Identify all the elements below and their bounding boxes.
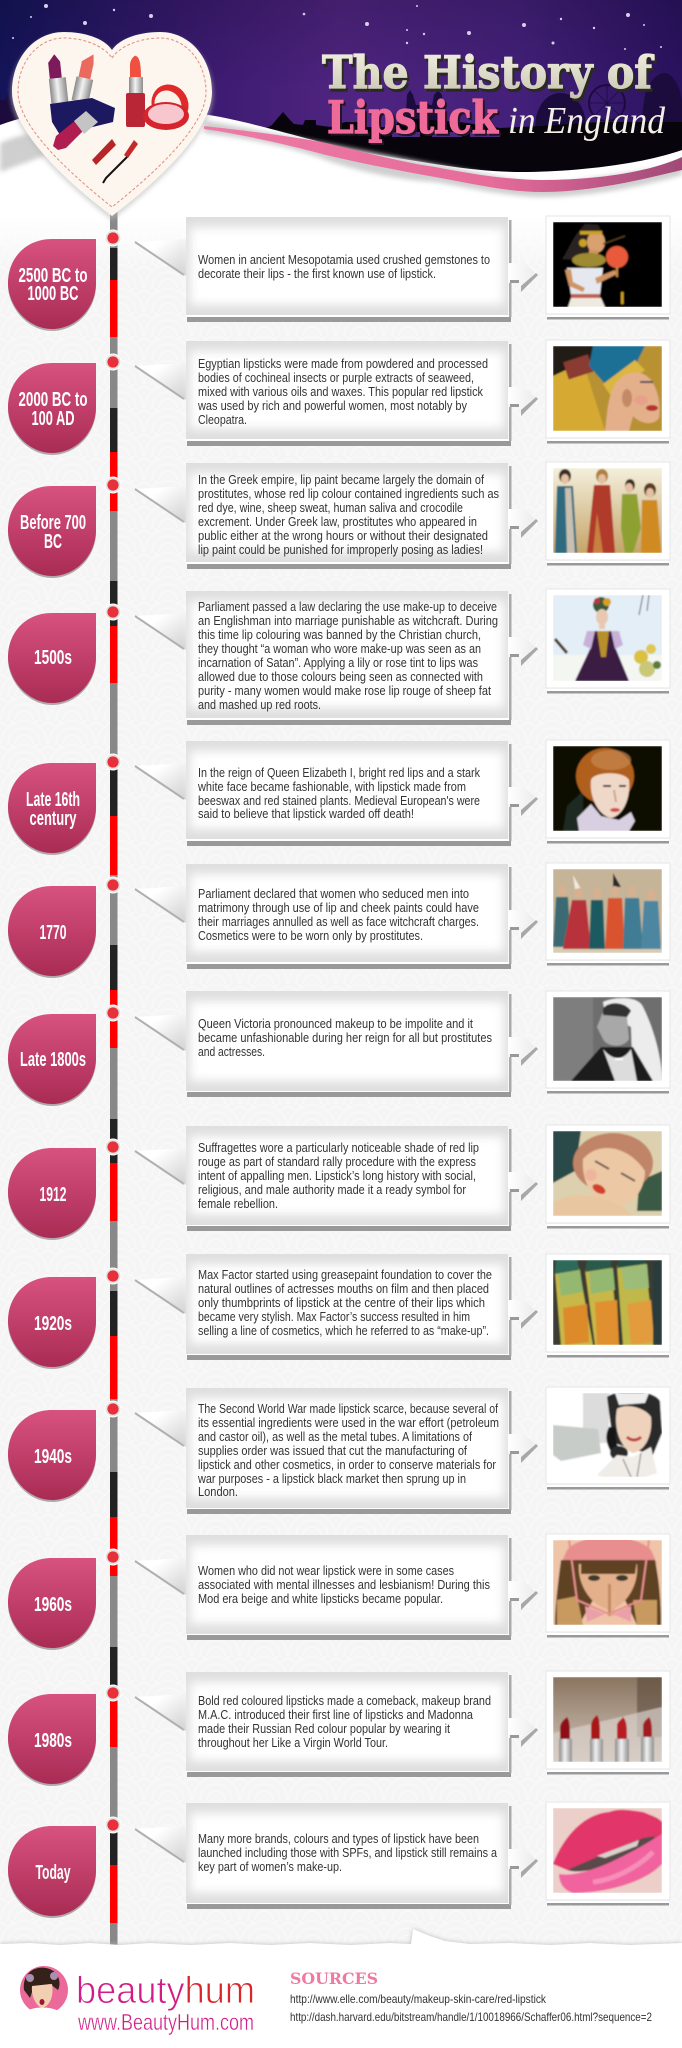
text panel: key part of women’s make-up. — [198, 1860, 342, 1874]
text panel: Suffragettes wore a particularly noticeable shade of red lip — [198, 1141, 479, 1155]
date badge: Late 1800s — [20, 1049, 86, 1071]
date badge — [8, 363, 96, 455]
text panel: lipstick and other cosmetics, in order to conserve materials for — [198, 1458, 496, 1472]
icon: purple lipstick — [46, 53, 68, 105]
arrow — [508, 505, 538, 538]
text panel: Women who did not wear lipstick were in some cases — [198, 1564, 454, 1578]
callout pointer — [135, 613, 186, 650]
website address: www.BeautyHum.com — [77, 2009, 254, 2035]
arrow — [508, 1296, 538, 1329]
entry: 2500 BC to 1000 BC — [8, 216, 670, 331]
photo: Nefertiti bust — [546, 340, 670, 444]
date badge — [8, 486, 96, 578]
header: night sky — [0, 0, 682, 185]
text panel: an Englishman into marriage punishable as witchcraft. During — [198, 614, 498, 628]
timeline dot — [105, 230, 121, 246]
timeline dot — [105, 877, 121, 893]
icon: mascara — [92, 139, 138, 183]
text panel — [186, 1803, 512, 1909]
text panel: white face became fashionable, with lipstick made from — [197, 780, 466, 794]
timeline dot — [105, 1268, 121, 1284]
footer torn paper edge — [0, 1929, 682, 2048]
timeline dot — [105, 1139, 121, 1155]
date badge: Today — [36, 1862, 71, 1884]
icon: navy lipstick base — [50, 98, 115, 135]
entry: 1980s — [8, 1671, 670, 1786]
entry: 1912 — [8, 1125, 670, 1240]
callout pointer — [135, 239, 186, 276]
entry: Late 16th century — [8, 740, 670, 855]
title line: The History of: The History of — [324, 49, 656, 102]
sources heading: SOURCES — [290, 1969, 378, 1988]
text panel: throughout her Like a Virgin World Tour. — [198, 1736, 388, 1750]
date badge — [8, 1558, 96, 1650]
text panel: its essential ingredients were used in the war effort (petroleum — [198, 1416, 499, 1430]
callout pointer — [135, 1148, 186, 1185]
text panel: excrement. Under Greek law, prostitutes who appeared in — [198, 515, 477, 529]
text panel: Cosmetics were to be worn only by prostitutes. — [198, 929, 423, 943]
date badge — [8, 239, 96, 331]
text panel: public either at the wrong hours or without their designated — [198, 529, 488, 543]
text panel: Many more brands, colours and types of lipstick have been — [198, 1832, 479, 1846]
logo: Beauty Hum — [20, 1966, 255, 2035]
date badge — [8, 1410, 96, 1502]
callout pointer — [135, 1014, 186, 1051]
entry: 1960s — [8, 1534, 670, 1650]
timeline dot — [105, 1817, 121, 1833]
text panel: and mashed up red roots. — [198, 698, 321, 712]
callout pointer — [135, 486, 186, 523]
date badge — [8, 1148, 96, 1240]
text panel: prostitutes, whose red lip colour contained ingredients such as — [198, 487, 499, 501]
text panel: Parliament declared that women who seduced men into — [198, 887, 469, 901]
text panel: The Second World War made lipstick scarce, because several of — [198, 1402, 498, 1416]
timeline dot — [105, 354, 121, 370]
text panel — [186, 1388, 512, 1514]
icon: dark pink lipstick lying — [53, 111, 98, 150]
text panel: they thought “a woman who wore make-up was seen as an — [198, 642, 481, 656]
timeline bar — [110, 212, 118, 1945]
title line: The History of: The History of — [322, 46, 654, 99]
date badge — [8, 1826, 96, 1918]
text panel — [186, 463, 512, 569]
timeline dot — [105, 604, 121, 620]
text panel: female rebellion. — [198, 1197, 278, 1211]
date badge: 1940s — [34, 1446, 72, 1468]
text panel — [186, 591, 512, 725]
timeline dot — [105, 1685, 121, 1701]
wordmark: beautyhum — [76, 1970, 255, 2012]
text panel: launched including those with SPFs, and lipstick still remains a — [198, 1846, 497, 1860]
icon: coral lipstick — [72, 52, 98, 103]
date badge: 1920s — [34, 1313, 72, 1335]
text panel — [186, 341, 512, 446]
date badge — [8, 1014, 96, 1106]
text panel: war purposes - a lipstick black market then sprung up in — [197, 1472, 466, 1486]
skyline behind — [0, 73, 682, 130]
text panel — [186, 1126, 512, 1231]
photo: lady in 16th century dress — [546, 589, 670, 694]
timeline dot — [105, 1549, 121, 1565]
text panel: Mod era beige and white lipsticks became popular. — [198, 1592, 443, 1606]
photo: greasepaint tubes — [546, 1254, 670, 1358]
text panel: Bold red coloured lipsticks made a comeback, makeup brand — [198, 1694, 491, 1708]
arrow — [508, 1714, 538, 1747]
arrow — [508, 633, 538, 666]
entry: 1770 — [8, 863, 670, 978]
photo: Egyptian woman with mirror — [546, 216, 670, 320]
callout pointer — [135, 1694, 186, 1731]
text panel: allowed due to those colours being seen as connected with — [198, 670, 483, 684]
sources — [290, 1969, 652, 2024]
heart emblem with cosmetics — [11, 32, 213, 220]
text panel: mixed with various oils and waxes. This popular red lipstick — [198, 385, 484, 399]
photo: four red lipsticks — [546, 1671, 670, 1774]
callout pointer — [135, 763, 186, 800]
date badge: century — [30, 808, 77, 830]
timeline dot — [105, 754, 121, 770]
entry: 1940s — [8, 1387, 670, 1514]
date badge: Late 16th — [26, 789, 80, 811]
timeline dot — [105, 477, 121, 493]
text panel — [186, 864, 512, 969]
text panel: bodies of cochineal insects or purple extracts of seaweed, — [198, 371, 474, 385]
header: white wave and pink ribbon — [0, 107, 682, 215]
arrow — [508, 1168, 538, 1201]
callout pointer — [135, 1826, 186, 1863]
text panel: was used by rich and powerful women, most notably by — [197, 399, 468, 413]
date badge — [8, 1694, 96, 1786]
text panel: In the Greek empire, lip paint became largely the domain of — [198, 473, 484, 487]
callout pointer — [135, 363, 186, 400]
callout pointer — [135, 1410, 186, 1447]
black city silhouette — [262, 112, 682, 180]
text panel: decorate their lips - the first known use of lipstick. — [198, 267, 436, 281]
text panel: Parliament passed a law declaring the use make-up to deceive — [198, 600, 497, 614]
entry: 1920s — [8, 1254, 670, 1369]
timeline dot — [105, 1401, 121, 1417]
callout pointer — [135, 1277, 186, 1314]
title — [322, 46, 666, 146]
date badge — [8, 763, 96, 855]
entry: Before 700 BC — [8, 462, 670, 578]
text panel — [186, 991, 512, 1097]
date badge: 1770 — [40, 922, 66, 944]
date badge: 100 AD — [32, 408, 74, 430]
text panel: beeswax and red stained plants. Medieval European's were — [198, 794, 480, 808]
text panel: M.A.C. introduced their first line of lipsticks and Madonna — [198, 1708, 473, 1722]
arrow — [508, 1033, 538, 1066]
text panel: became very stylish. Max Factor’s success resulted in him — [198, 1310, 470, 1324]
text panel: London. — [198, 1485, 238, 1499]
text panel: religious, and male authority made it a ready symbol for — [198, 1183, 466, 1197]
text panel — [186, 217, 512, 322]
photo: Queen Victoria — [546, 991, 670, 1094]
arrow — [508, 906, 538, 939]
photo: nurse on phone — [546, 1387, 670, 1490]
title line: Lipstick: Lipstick — [327, 91, 499, 144]
text panel: Max Factor started using greasepaint foundation to cover the — [198, 1268, 492, 1282]
arrow — [508, 783, 538, 816]
text panel: lip paint could be punished for improperly posing as ladies! — [198, 543, 483, 557]
text panel: this time lip colouring was banned by the Christian church, — [198, 628, 481, 642]
arrow — [508, 1430, 538, 1463]
text panel: made their Russian Red colour popular by wearing it — [198, 1722, 450, 1736]
text panel: said to believe that lipstick warded off death! — [198, 807, 414, 821]
stars — [12, 4, 662, 50]
text panel: selling a line of cosmetics, which he referred to as “make-up”. — [198, 1324, 489, 1338]
photo: Queen Elizabeth I — [546, 740, 670, 844]
photo: 1960s model with pink hat — [546, 1534, 670, 1638]
entry: 1500s — [8, 589, 670, 725]
text panel: red dye, wine, sheep sweat, human saliva and crocodile — [198, 501, 463, 515]
date badge: 1960s — [34, 1594, 72, 1616]
text panel: their marriages annulled as well as face witchcraft charges. — [198, 915, 479, 929]
text panel: purity - many women would make rose lip rouge of sheep fat — [198, 684, 491, 698]
text panel: Women in ancient Mesopotamia used crushed gemstones to — [198, 253, 490, 267]
date badge: 1912 — [40, 1184, 66, 1206]
arrow — [508, 1577, 538, 1610]
photo: pink lips close-up — [546, 1802, 670, 1906]
date badge: 2000 BC to — [18, 389, 88, 411]
photo: medieval group — [546, 863, 670, 966]
icon: compact mirror — [143, 78, 196, 130]
callout pointer — [135, 1558, 186, 1595]
date badge: 2500 BC to — [18, 265, 88, 287]
text panel — [186, 1672, 512, 1777]
text panel — [186, 1535, 512, 1640]
date badge — [8, 886, 96, 978]
title line: Lipstick: Lipstick — [329, 93, 501, 146]
text panel: Queen Victoria pronounced makeup to be impolite and it — [198, 1017, 473, 1031]
text panel: associated with mental illnesses and lesbianism! During this — [198, 1578, 490, 1592]
date badge: Before 700 — [20, 512, 86, 534]
text panel: supplies order was issued that cut the manufacturing of — [198, 1444, 467, 1458]
text panel: incarnation of Satan”. Applying a lily or rose tint to lips was — [198, 656, 478, 670]
icon: red upright lipstick — [126, 56, 145, 127]
entry: 2000 BC to 100 AD — [8, 340, 670, 455]
text panel: matrimony through use of lip and cheek paints could have — [198, 901, 479, 915]
text panel: only thumbprints of lipstick at the centre of their lips which — [198, 1296, 485, 1310]
text panel: rouge as part of standard rally procedure with the express — [198, 1155, 476, 1169]
entry: Late 1800s — [8, 991, 670, 1106]
text panel: became unfashionable during her reign for all but prostitutes — [198, 1031, 492, 1045]
photo: Greek women — [546, 462, 670, 566]
date badge: 1000 BC — [28, 283, 78, 305]
source link 1: http://www.elle.com/beauty/makeup-skin-care/red-lipstick — [290, 1992, 547, 2006]
arrow — [508, 383, 538, 416]
text panel: natural outlines of actresses mouths on film and then placed — [198, 1282, 489, 1296]
text panel: Egyptian lipsticks were made from powdered and processed — [198, 357, 488, 371]
title line: in England: in England — [508, 100, 666, 142]
timeline dot — [105, 1005, 121, 1021]
text panel — [186, 1254, 512, 1360]
date badge: 1980s — [34, 1730, 72, 1752]
date badge: 1500s — [34, 647, 72, 669]
date badge: BC — [44, 531, 62, 553]
arrow — [508, 1845, 538, 1878]
date badge — [8, 613, 96, 705]
text panel: and actresses. — [198, 1045, 265, 1059]
arrow — [508, 259, 538, 292]
text panel: In the reign of Queen Elizabeth I, bright red lips and a stark — [198, 766, 481, 780]
text panel: and castor oil), as well as the metal tubes. A limitations of — [198, 1430, 472, 1444]
text panel: Cleopatra. — [198, 413, 247, 427]
entry: Today — [8, 1802, 670, 1918]
text panel: intent of appalling men. Lipstick’s long history with social, — [198, 1169, 476, 1183]
text panel — [186, 741, 512, 846]
callout pointer — [135, 886, 186, 923]
date badge — [8, 1277, 96, 1369]
icon: woman in curlers — [20, 1966, 68, 2014]
photo: 1910s portrait — [546, 1125, 670, 1228]
